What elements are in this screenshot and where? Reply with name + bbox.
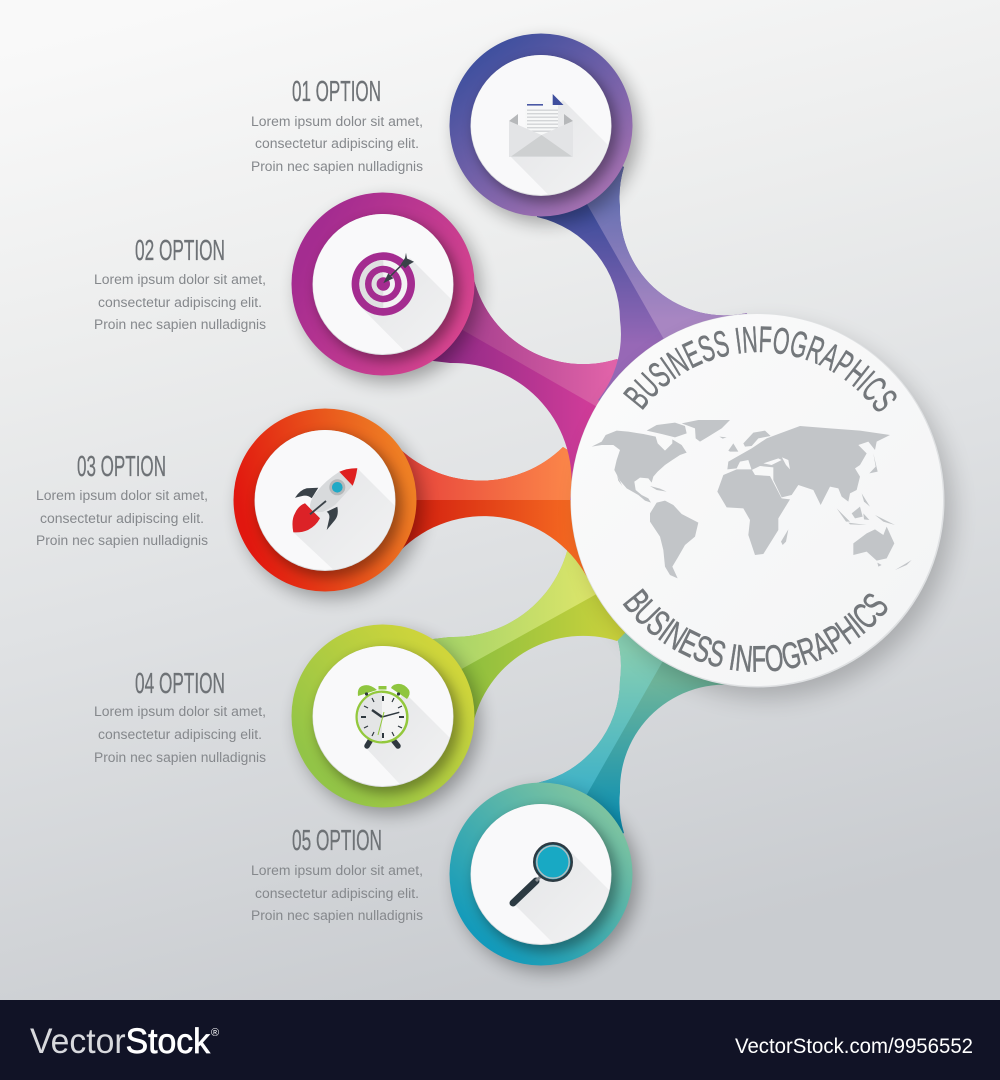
text block: option 01: [251, 76, 423, 174]
body 02: Lorem ipsum dolor sit amet,: [94, 272, 266, 287]
node 03: rocket: [230, 406, 432, 608]
body 03: Proin nec sapien nulladignis: [36, 533, 208, 548]
heading 05: 05 OPTION: [292, 825, 382, 857]
footer reference: VectorStock.com/9956552: [735, 1035, 973, 1058]
curved title: top: BUSINESS INFOGRAPHICS: [623, 326, 897, 412]
node 04: clock: [288, 622, 490, 824]
body 01: consectetur adipiscing elit.: [255, 136, 419, 151]
body 04: Proin nec sapien nulladignis: [94, 750, 266, 765]
body 03: Lorem ipsum dolor sit amet,: [36, 488, 208, 503]
body 02: [94, 272, 266, 332]
icon: target: [352, 252, 451, 350]
connector: teal option 05: [537, 632, 726, 834]
connector: pink option 02: [432, 280, 618, 500]
body 03: consectetur adipiscing elit.: [40, 511, 204, 526]
connector: purple option 01: [537, 166, 748, 401]
text block: option 04: [94, 668, 266, 765]
body 01: [251, 114, 423, 174]
icon: envelope: [509, 94, 608, 194]
node 02: target: [288, 190, 490, 392]
body 05: Lorem ipsum dolor sit amet,: [251, 863, 423, 878]
footer logo: VectorStock: [30, 1022, 210, 1061]
connector: orange option 03: [402, 447, 587, 577]
body 02: consectetur adipiscing elit.: [98, 295, 262, 310]
heading 01: 01 OPTION: [292, 76, 381, 108]
footer bar: [0, 1000, 1000, 1080]
node 01: envelope: [446, 30, 648, 234]
body 03: [36, 488, 208, 548]
body 04: [94, 704, 266, 765]
body 01: Proin nec sapien nulladignis: [251, 159, 423, 174]
body 01: Lorem ipsum dolor sit amet,: [251, 114, 423, 129]
text block: option 02: [94, 235, 266, 332]
registered mark: ®: [211, 1027, 219, 1039]
map: Africa, Eurasia, Oceania: [717, 426, 912, 570]
heading 02: 02 OPTION: [135, 235, 225, 267]
body 05: [251, 863, 423, 923]
text block: option 05: [251, 825, 423, 923]
world map: [592, 420, 912, 578]
heading 03: 03 OPTION: [77, 451, 166, 483]
node 05: magnifier: [446, 780, 648, 982]
icon: alarm clock: [355, 684, 449, 784]
curved title: bottom: BUSINESS INFOGRAPHICS: [622, 588, 888, 672]
map: Americas: [592, 420, 730, 578]
body 05: Proin nec sapien nulladignis: [251, 908, 423, 923]
connector: yellow option 04: [432, 550, 626, 720]
body 02: Proin nec sapien nulladignis: [94, 317, 266, 332]
text block: option 03: [36, 451, 208, 548]
body 04: consectetur adipiscing elit.: [98, 727, 262, 742]
icon: rocket: [292, 468, 394, 569]
body 05: consectetur adipiscing elit.: [255, 886, 419, 901]
central globe panel: [570, 314, 962, 708]
icon: magnifier: [510, 842, 609, 942]
body 04: Lorem ipsum dolor sit amet,: [94, 704, 266, 719]
heading 04: 04 OPTION: [135, 668, 225, 700]
